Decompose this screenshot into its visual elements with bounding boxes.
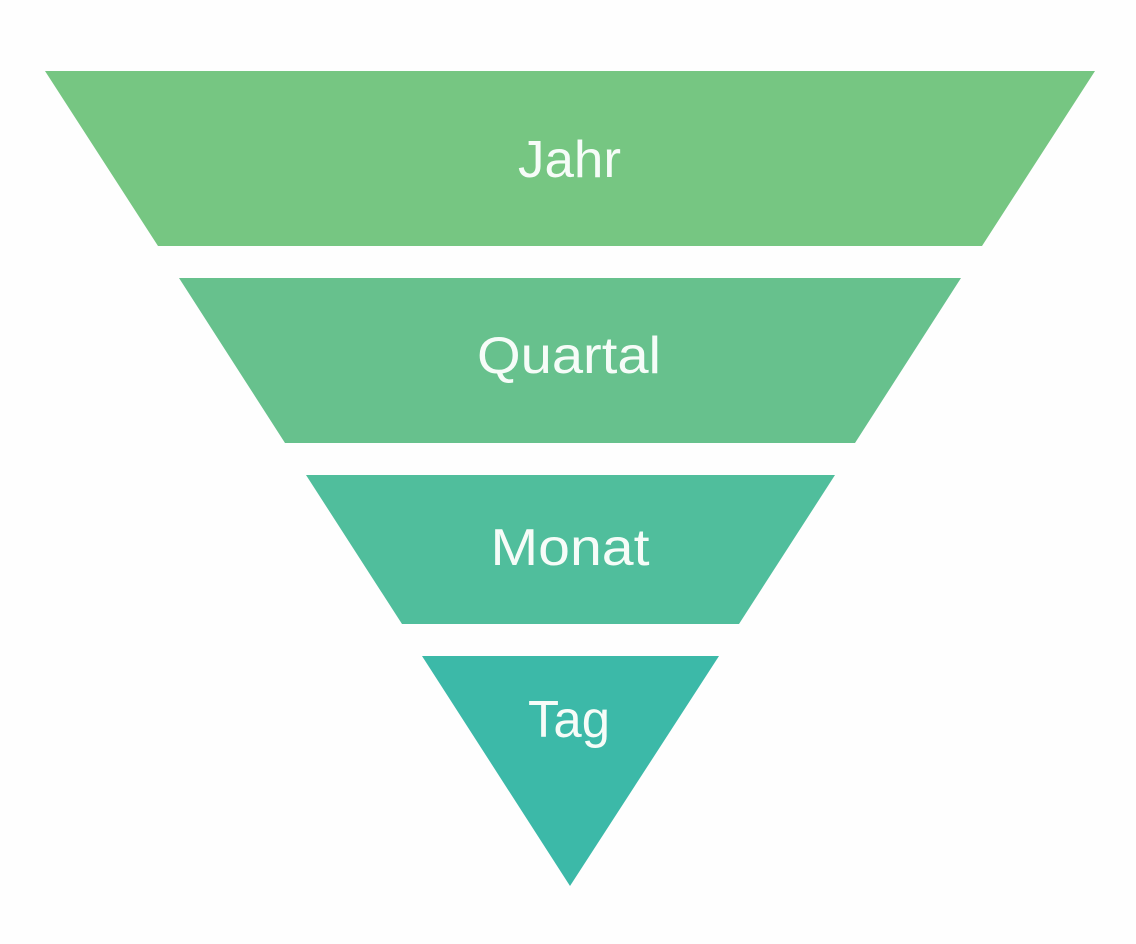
funnel level: Jahr	[45, 71, 1095, 246]
funnel level: Quartal: Quartal	[477, 327, 661, 385]
funnel level: Quartal	[179, 278, 961, 443]
funnel level: Monat	[306, 475, 835, 624]
funnel level: Tag	[422, 656, 719, 886]
funnel level: Jahr: Jahr	[518, 131, 621, 189]
funnel level: Monat: Monat	[490, 519, 650, 577]
funnel level: Tag: Tag	[528, 691, 610, 749]
